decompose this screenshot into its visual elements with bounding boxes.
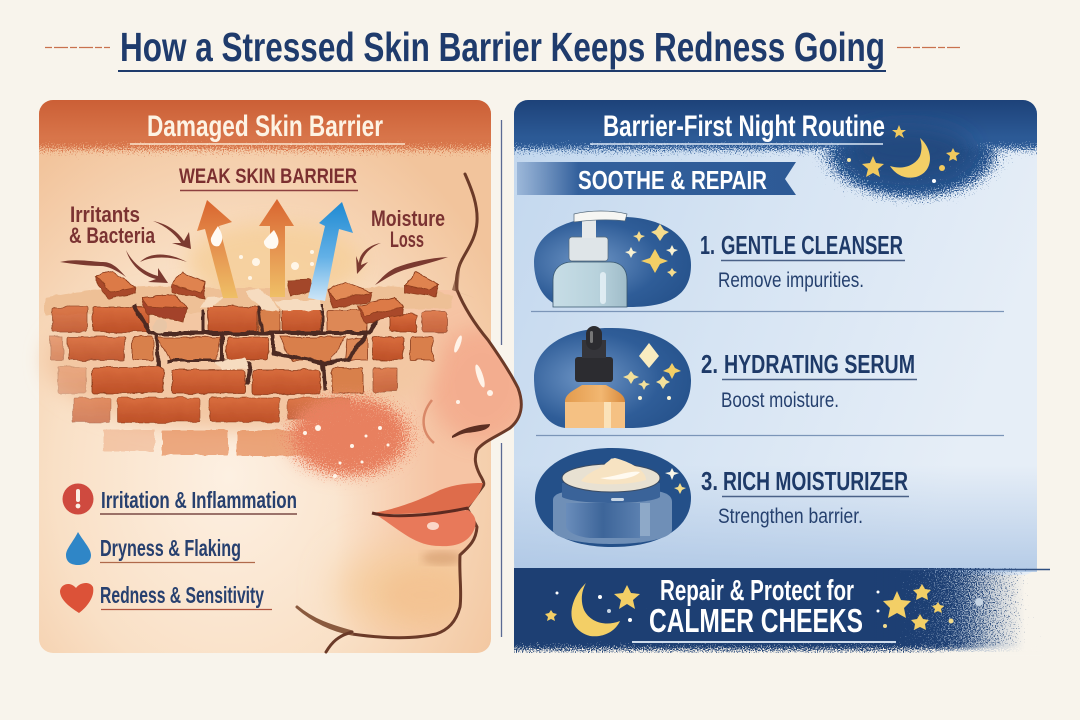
symptom: dryness and flaking: Dryness & Flaking <box>100 535 241 561</box>
icon: serum dropper bottle <box>534 326 691 428</box>
curved pointer arrows <box>60 221 448 285</box>
step 2: hydrating serum <box>534 326 917 428</box>
nose highlights <box>453 335 493 404</box>
step 1: gentle cleanser: 1. <box>700 230 715 260</box>
brick row 5 <box>103 430 329 456</box>
arrow: blue moisture <box>308 202 353 301</box>
label: irritants and bacteria: & Bacteria <box>69 223 156 248</box>
arrows rising from the wall <box>197 199 353 301</box>
footer banner: calmer cheeks <box>514 568 1050 656</box>
face outline <box>297 174 521 652</box>
symptom: dryness and flaking <box>66 532 255 565</box>
heading: weak skin barrier: WEAK SKIN BARRIER <box>179 165 357 188</box>
water droplets <box>211 226 222 246</box>
symptom: irritation and inflammation: Irritation & Inflammation <box>101 487 297 513</box>
label: moisture loss: Loss <box>390 227 424 252</box>
brick row 4 <box>73 398 350 422</box>
symptom: redness and sensitivity: Redness & Sensitivity <box>100 582 264 608</box>
step 3: rich moisturizer: 3. <box>701 466 718 496</box>
brick wall <box>45 272 452 456</box>
arrow: centre orange <box>259 199 294 297</box>
step 2: hydrating serum: 2. <box>701 349 718 379</box>
icon: crescent moon and stars <box>847 125 960 183</box>
section ribbon: soothe and repair <box>517 162 796 195</box>
symptom: redness and sensitivity <box>60 582 272 613</box>
section ribbon: soothe and repair: SOOTHE & REPAIR <box>578 165 767 195</box>
panel: damaged skin barrier <box>39 100 534 653</box>
icon: heart <box>60 583 93 613</box>
brick row 3 <box>58 367 397 394</box>
step 1: gentle cleanser: GENTLE CLEANSER <box>721 230 903 260</box>
step 1: gentle cleanser <box>534 211 905 307</box>
icon: moisturizer jar <box>535 448 691 547</box>
arrow: left orange <box>197 200 238 298</box>
step 1: gentle cleanser: Remove impurities. <box>718 269 864 292</box>
step 2: hydrating serum: Boost moisture. <box>721 389 839 412</box>
panel: barrier-first night routine <box>514 84 1050 656</box>
icon: warning <box>62 484 94 514</box>
damaged cracks <box>134 305 378 390</box>
panel header: night routine: Barrier-First Night Routine <box>603 110 885 143</box>
face profile <box>297 174 521 652</box>
step 3: rich moisturizer <box>535 448 909 547</box>
label: irritants and bacteria: Irritants <box>70 202 140 227</box>
icon: water drop <box>66 532 91 565</box>
skin shading behind the wall <box>45 288 435 432</box>
symptom: irritation and inflammation <box>62 484 297 514</box>
cheek redness <box>258 374 442 498</box>
rubble <box>153 288 322 370</box>
step 2: hydrating serum: HYDRATING SERUM <box>724 349 915 379</box>
icon: cleanser pump bottle <box>534 211 691 307</box>
panel header: damaged skin barrier: Damaged Skin Barrier <box>147 110 383 143</box>
icon: footer moon and stars <box>545 583 983 636</box>
glow behind arrows <box>187 222 363 302</box>
label: moisture loss: Moisture <box>371 206 445 231</box>
lips <box>372 483 483 514</box>
skin of the face <box>328 290 520 636</box>
panel header: night routine <box>514 100 1037 208</box>
brick row 2 <box>50 337 433 361</box>
step 3: rich moisturizer: RICH MOISTURIZER <box>723 466 908 496</box>
panel header: damaged skin barrier <box>39 100 491 160</box>
loose bricks <box>95 272 439 323</box>
brick row 1 <box>53 307 447 332</box>
footer banner: calmer cheeks: CALMER CHEEKS <box>649 602 863 639</box>
label: moisture loss <box>371 206 445 252</box>
step 3: rich moisturizer: Strengthen barrier. <box>718 505 863 528</box>
divider between panels <box>500 120 502 637</box>
footer banner: calmer cheeks: Repair & Protect for <box>660 575 854 607</box>
label: irritants and bacteria <box>69 202 156 248</box>
